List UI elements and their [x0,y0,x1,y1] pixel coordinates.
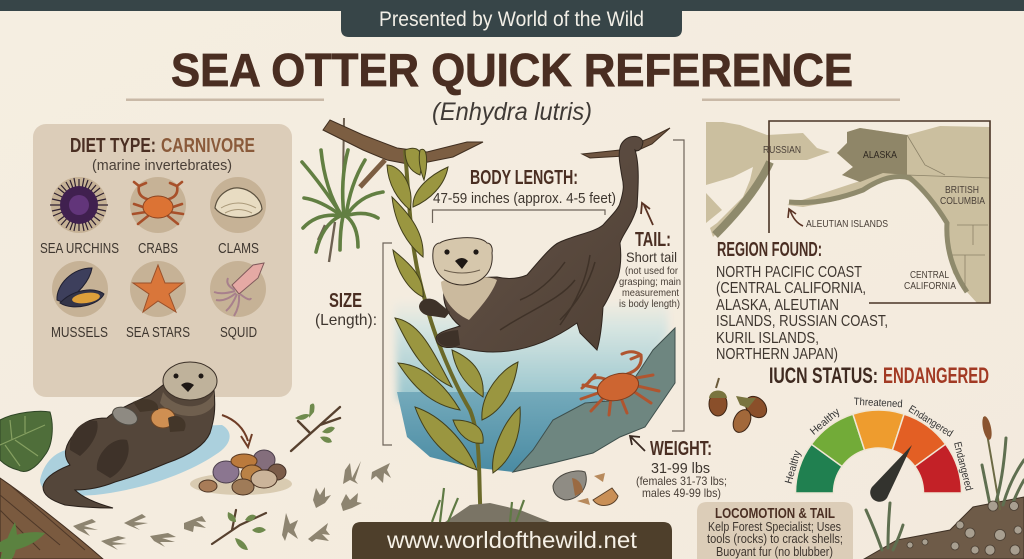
arrow: weight [630,436,645,451]
icon: mussel [52,261,108,317]
label: sea urchins: SEA URCHINS [40,241,119,257]
arrow: tail [641,203,653,225]
label: clams: CLAMS [218,241,259,257]
upper paw [419,299,450,318]
label: region found: ISLANDS, RUSSIAN COAST, [716,313,888,330]
label: tail: Short tail [626,249,677,265]
label: tail: (not used for [625,265,678,277]
otter feet [70,421,129,478]
illustration: otter floating on back [40,362,230,508]
map: region: RUSSIAN [763,144,801,156]
label: size: (Length): [315,312,377,329]
panel: locomotion and tail: LOCOMOTION & TAIL [715,505,835,522]
map: region: BRITISH [945,184,979,196]
label: body length [433,167,616,207]
label: weight: males 49-99 lbs) [642,486,721,500]
label: crabs: CRABS [138,241,178,257]
gauge: conservation status: Healthy [783,448,804,485]
map: region: ALEUTIAN ISLANDS [806,218,888,230]
label: weight: 31-99 lbs [651,460,710,477]
label: body length: BODY LENGTH: [470,167,578,189]
land: north america [787,126,990,303]
label: iucn status [769,363,989,388]
label: weight: WEIGHT: [650,438,712,460]
icon: acorns [709,378,771,435]
panel: locomotion and tail: Buoyant fur (no blubber) [716,544,833,559]
header bar: Presented by World of the Wild [379,8,644,31]
diet heading [70,135,255,174]
label: region found: NORTH PACIFIC COAST [716,264,862,281]
illustration: otter hanging by tail [419,128,670,352]
title: SEA OTTER QUICK REFERENCE [171,44,853,96]
gauge segment: threatened [853,410,904,450]
label: tail [619,229,681,310]
rock [513,328,675,472]
land: asia [706,122,830,237]
label: region found: NORTHERN JAPAN) [716,346,838,363]
panel: locomotion and tail [697,502,853,559]
illustration: air plant [302,118,383,262]
icon: squid [210,261,266,317]
rock and shell [110,404,140,428]
icon: crab [130,177,186,233]
illustration: barnacle rocks and reeds [864,415,1024,559]
diet heading: CARNIVORE [161,135,255,157]
map: region: CALIFORNIA [904,280,956,292]
fur detail [500,255,595,330]
website banner: www.worldofthewild.net [386,527,638,553]
illustration: water scene [394,300,675,472]
gauge: conservation status: Endangered [906,403,955,440]
website banner [352,522,672,559]
otter neck [160,392,214,416]
label: tail: measurement [622,287,679,299]
gauge: conservation status: Healthy [808,405,843,438]
gauge: conservation status: Threatened [853,396,903,410]
label: region found: (CENTRAL CALIFORNIA, [716,280,866,297]
right branch [582,128,670,158]
map: region: COLUMBIA [940,195,985,207]
subtitle: (Enhydra lutris) [432,98,592,126]
icon: sea star [130,261,186,317]
otter head [163,362,217,400]
gauge needle [870,445,912,502]
gauge segment: endangered [892,414,946,466]
illustration: shell pile [190,450,292,495]
body and tail [436,136,643,352]
label: tail: grasping; main [619,276,681,288]
twig upper [291,404,340,451]
gauge: conservation status [783,396,975,502]
gauge: conservation status: Endangered [951,441,975,492]
map frame [769,121,990,303]
twig lower [212,510,266,550]
gauge segment: healthy [796,444,842,493]
icon: clam [210,177,266,233]
label: size: SIZE [329,290,362,312]
illustration: log and leaves [0,411,103,559]
label: weight [636,438,727,500]
label: region found: REGION FOUND: [717,239,822,261]
lower paw [437,330,460,347]
label: region found: KURIL ISLANDS, [716,330,819,347]
chest [441,276,497,320]
header bar [0,0,1024,37]
gauge segment: critical [915,444,962,493]
label: body length: 47-59 inches (approx. 4-5 feet) [433,190,616,207]
illustration: crab on rock [581,352,659,415]
label: tail: is body length) [619,298,680,310]
land: alaska [837,128,907,182]
map: region: ALASKA [863,149,897,161]
map: region [706,121,990,303]
label: size [315,290,377,329]
map: region: CENTRAL [910,269,949,281]
illustration: kelp base rocks [432,488,550,522]
illustration: branch left [323,120,483,187]
label: squid: SQUID [220,325,257,341]
diet heading: DIET TYPE: [70,135,156,157]
bracket: size [383,243,392,445]
label: sea stars: SEA STARS [126,325,190,341]
label: iucn status: IUCN STATUS: [769,363,878,388]
footprints [73,461,391,550]
borders [907,135,990,290]
icon: sea urchin [50,177,108,233]
label: region found: ALASKA, ALEUTIAN [716,297,839,314]
panel: locomotion and tail: Kelp Forest Specialist; Uses [708,519,841,534]
label: region found [716,239,888,363]
otter body [43,379,215,508]
bracket: body length [432,210,605,223]
label: weight: (females 31-73 lbs; [636,474,727,488]
label: mussels: MUSSELS [51,325,108,341]
head [433,238,492,285]
gauge segment: healthy light [811,414,865,466]
bracket: tail and weight [672,140,684,431]
label: tail: TAIL: [635,229,671,251]
arrow: otter to shells [222,415,252,447]
water patch [40,425,230,496]
illustration: kelp [387,148,520,522]
illustration: broken shell and stone [553,471,618,506]
panel: diet type [33,124,292,397]
habitat range [789,176,967,292]
panel: locomotion and tail: tools (rocks) to crack shells; [707,531,843,546]
diet heading: (marine invertebrates) [92,157,232,174]
